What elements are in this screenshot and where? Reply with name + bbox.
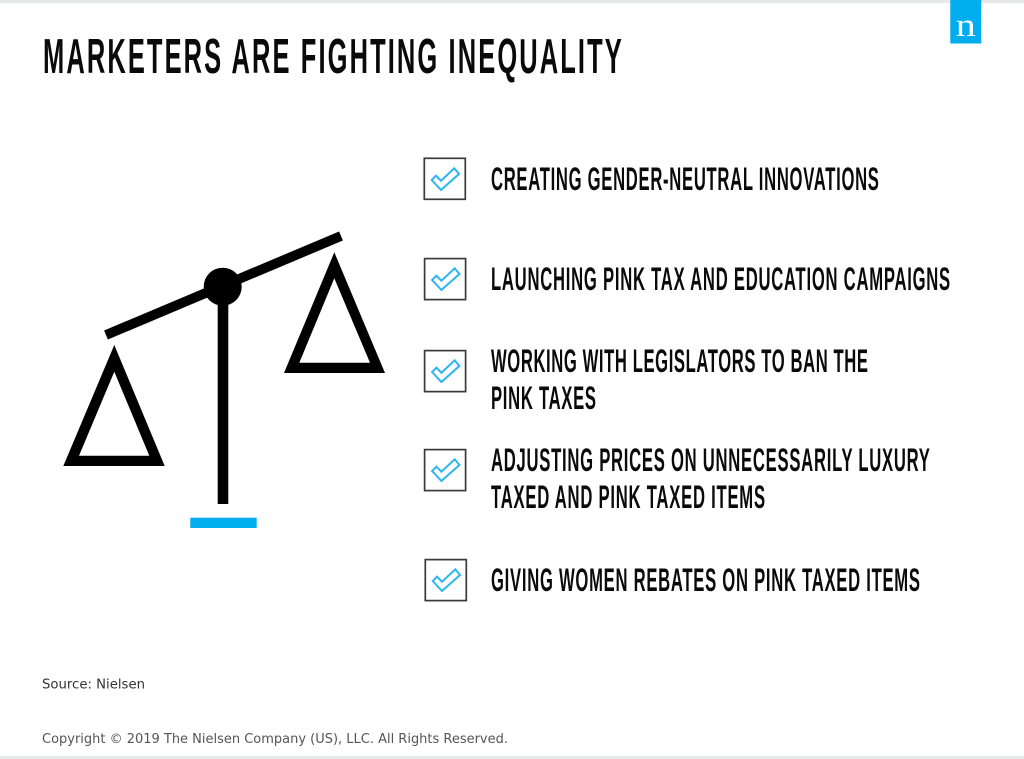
- scale beam: [106, 236, 341, 335]
- source note: Source: Nielsen: [42, 678, 145, 692]
- item 5: rebates: [425, 560, 920, 601]
- item 4: adjusting prices: [425, 443, 930, 516]
- item 3 text: WORKING WITH LEGISLATORS TO BAN THE: [491, 344, 868, 380]
- checkbox 5: [425, 560, 466, 601]
- right pan triangle: [284, 252, 385, 373]
- item 3 text: [491, 344, 868, 417]
- scale base: [190, 518, 257, 528]
- logo: Nielsen n: n: [956, 8, 976, 44]
- scale pivot: [204, 268, 242, 306]
- item 3: legislators: [425, 344, 868, 417]
- item 1 text: CREATING GENDER-NEUTRAL INNOVATIONS: [491, 162, 879, 198]
- item 4 text: ADJUSTING PRICES ON UNNECESSARILY LUXURY: [491, 443, 930, 479]
- logo: Nielsen n: [950, 0, 981, 44]
- scale pole: [218, 286, 228, 504]
- left pan triangle: [63, 345, 165, 466]
- checkbox 3: [425, 351, 466, 392]
- copyright: Copyright © 2019 The Nielsen Company (US), LLC. All Rights Reserved.: [42, 732, 508, 747]
- item 1: gender-neutral innovations: [424, 158, 879, 199]
- item 2 text: LAUNCHING PINK TAX AND EDUCATION CAMPAIGNS: [491, 262, 950, 298]
- icon: balance scale: [63, 236, 385, 528]
- item 2: education campaigns: [425, 259, 950, 300]
- title: MARKETERS ARE FIGHTING INEQUALITY: [43, 30, 622, 84]
- checkbox 1: [424, 158, 465, 199]
- item 5 text: GIVING WOMEN REBATES ON PINK TAXED ITEMS: [491, 563, 920, 599]
- item 4 text: [491, 443, 930, 516]
- item 4 text: TAXED AND PINK TAXED ITEMS: [491, 480, 765, 516]
- item 3 text: PINK TAXES: [491, 381, 596, 417]
- checkbox 2: [425, 259, 466, 300]
- checkbox 4: [425, 450, 466, 491]
